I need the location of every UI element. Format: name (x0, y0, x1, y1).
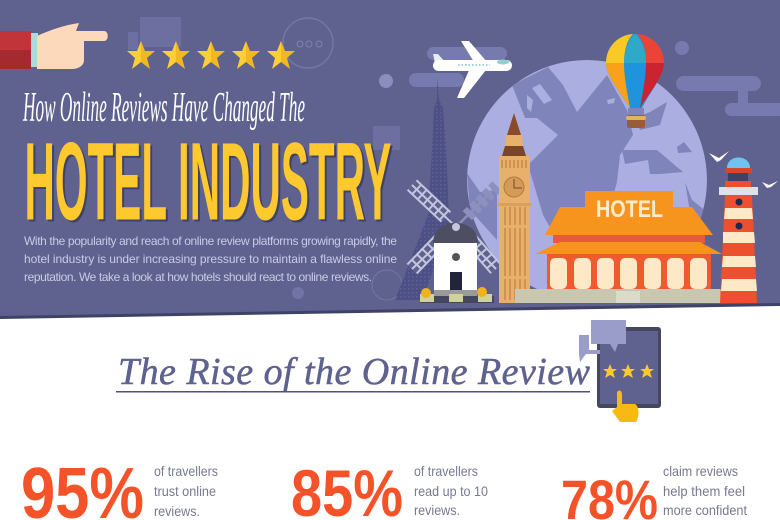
stat 78%: help them feel (663, 483, 745, 499)
intro paragraph: With the popularity and reach of online review platforms growing rapidly, the (24, 234, 397, 248)
section heading: The Rise of the Online Review (118, 351, 591, 393)
stat 85%: of travellers (414, 463, 478, 479)
text: How Online Reviews Have Changed The (23, 85, 305, 131)
airplane (433, 41, 512, 98)
faint background icons (128, 17, 402, 300)
intro paragraph: reputation. We take a look at how hotels should react to online reviews. (24, 270, 372, 284)
intro paragraph (24, 234, 397, 284)
intro paragraph: hotel industry is under increasing pressure to maintain a flawless online (24, 252, 397, 266)
heading underline (116, 391, 590, 392)
globe (467, 60, 707, 300)
hotel building (515, 191, 722, 303)
clouds (409, 41, 780, 116)
stat 78%: claim reviews (663, 463, 738, 479)
birds (709, 151, 778, 188)
lighthouse (719, 158, 758, 303)
stat 85%: read up to 10 (414, 483, 488, 499)
hotel sign text: HOTEL (596, 196, 663, 223)
stat 95%: of travellers (154, 463, 218, 479)
stat 78% (561, 463, 747, 520)
pointing hand (0, 23, 108, 69)
stat 95%: trust online (154, 483, 216, 499)
stat 85% (291, 456, 488, 520)
five stars (127, 41, 295, 69)
hero background (0, 0, 780, 319)
tablet icon (579, 320, 661, 422)
stat 85%: reviews. (414, 502, 460, 518)
stat 95%: reviews. (154, 503, 200, 519)
big ben tower (498, 113, 531, 303)
windmill (412, 185, 497, 303)
eiffel tower (395, 77, 470, 300)
stat 78%: more confident (663, 502, 747, 518)
hot air balloon (606, 34, 664, 128)
